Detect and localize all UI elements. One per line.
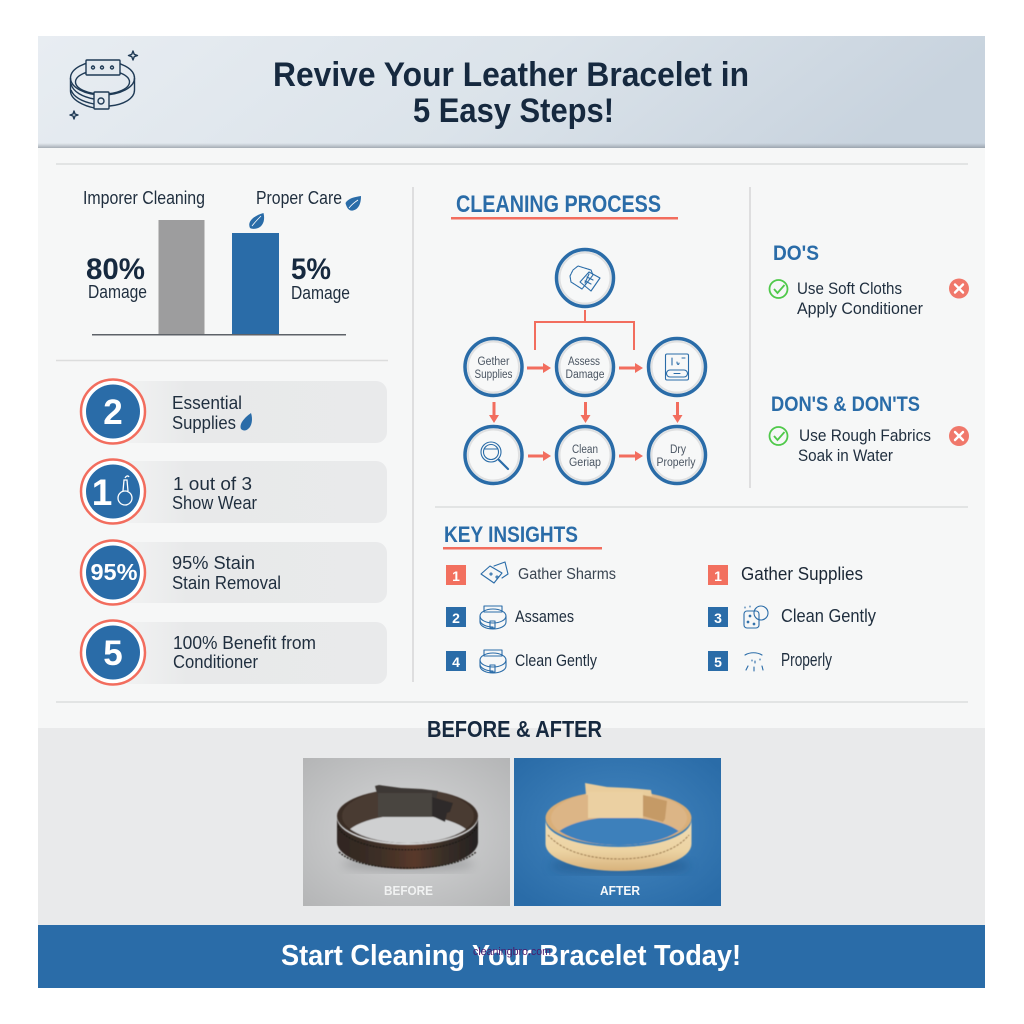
insight: assames: 2 xyxy=(452,610,460,626)
value: 5% damage: Damage xyxy=(291,283,350,303)
bar chart: damage comparison xyxy=(83,188,361,336)
icon: check xyxy=(770,427,788,445)
bar: proper 5% xyxy=(232,233,279,335)
card: essential supplies: Essential xyxy=(172,393,242,413)
card: essential supplies: 2 xyxy=(103,393,123,432)
key insights list xyxy=(446,562,876,673)
bar: improper 80% xyxy=(158,220,204,335)
icon: leaf by proper care xyxy=(346,196,361,211)
node: dry properly xyxy=(648,426,706,484)
value: 80% damage: 80% xyxy=(86,253,145,286)
do's text: Use Soft Cloths xyxy=(797,279,902,298)
node: clean geriap: Geriap xyxy=(569,457,601,469)
insight: gather supplies: Gather Supplies xyxy=(741,564,863,584)
card: 95% stain removal xyxy=(81,540,387,604)
node: clean geriap: Clean xyxy=(572,444,598,456)
call to action banner xyxy=(38,925,985,988)
icon: bracelet with sparkles xyxy=(70,51,138,119)
card: essential supplies: Supplies xyxy=(172,413,236,433)
node: assess damage xyxy=(556,338,614,396)
insight: gather sharms: Gather Sharms xyxy=(518,566,616,583)
node: magnifier icon xyxy=(465,426,522,484)
don'ts text xyxy=(798,426,931,465)
panel: don's and don'ts xyxy=(770,393,969,465)
stat cards xyxy=(81,380,387,684)
card: 1 out of 3: 1 out of 3 xyxy=(173,474,252,494)
call to action banner: Start Cleaning Your Bracelet Today! xyxy=(281,940,741,972)
heading: do's: DO'S xyxy=(773,242,819,265)
node: top icon xyxy=(556,250,614,306)
photo: before bracelet: BEFORE xyxy=(384,883,433,898)
insight: clean gently left xyxy=(446,650,598,673)
don'ts text: Use Rough Fabrics xyxy=(799,426,931,445)
heading: before & after: BEFORE & AFTER xyxy=(427,716,602,742)
card: 100% benefit: 100% Benefit from xyxy=(173,633,316,653)
icon: check xyxy=(770,280,788,298)
insight: properly xyxy=(708,650,832,671)
insight: clean gently right: Clean Gently xyxy=(781,606,876,626)
card: 1 out of 3: 1 xyxy=(92,472,112,513)
heading: don's & don'ts: DON'S & DON'TS xyxy=(771,393,920,416)
value: 5% damage xyxy=(291,253,350,303)
card: 1 out of 3 xyxy=(81,460,387,524)
card: 95% stain removal: 95% Stain xyxy=(172,553,255,573)
value: 80% damage: Damage xyxy=(88,282,147,302)
do's text xyxy=(797,279,923,318)
insight: gather sharms xyxy=(446,562,616,585)
node: gether supplies: Supplies xyxy=(474,369,513,381)
node: assess damage: Assess xyxy=(568,356,600,368)
node: gether supplies: Gether xyxy=(478,356,510,368)
insight: properly: Properly xyxy=(781,650,832,670)
node: dry properly: Dry xyxy=(670,444,686,456)
insight: clean gently right: 3 xyxy=(714,610,722,626)
card: 95% stain removal: 95% xyxy=(90,559,138,585)
insight: clean gently right xyxy=(708,606,876,628)
card: essential supplies xyxy=(81,380,387,444)
title: Revive Your Leather Bracelet in xyxy=(273,56,749,94)
panel: do's xyxy=(770,242,969,318)
node: assess damage: Damage xyxy=(566,369,604,381)
label: proper care: Proper Care xyxy=(256,188,342,208)
card: 100% benefit: Conditioner xyxy=(173,652,258,672)
node: dry properly: Properly xyxy=(656,457,696,469)
node: gether supplies xyxy=(465,338,522,396)
title xyxy=(273,56,749,130)
value: 5% damage: 5% xyxy=(291,253,331,286)
header band xyxy=(38,36,985,148)
watermark: cleaningbro.com xyxy=(473,946,551,958)
heading: cleaning process: CLEANING PROCESS xyxy=(456,191,661,218)
insight: properly: 5 xyxy=(714,654,722,670)
insight: clean gently left: 4 xyxy=(452,654,460,670)
arrows xyxy=(489,363,682,461)
insight: assames xyxy=(446,606,574,629)
section: before and after xyxy=(38,716,985,925)
insight: clean gently left: Clean Gently xyxy=(515,652,598,670)
heading: key insights: KEY INSIGHTS xyxy=(444,522,578,547)
do's text: Apply Conditioner xyxy=(797,299,923,318)
axis xyxy=(92,334,346,336)
node: device icon xyxy=(648,338,706,396)
icon: cross xyxy=(949,426,969,446)
card: 95% stain removal: Stain Removal xyxy=(172,573,281,593)
icon: cross xyxy=(949,278,969,298)
flowchart xyxy=(465,250,706,484)
label: improper cleaning: Imporer Cleaning xyxy=(83,188,205,208)
title: 5 Easy Steps! xyxy=(413,92,614,130)
don'ts text: Soak in Water xyxy=(798,446,893,465)
node: clean geriap xyxy=(556,426,614,484)
connector bracket xyxy=(535,310,634,350)
card: 100% benefit xyxy=(81,620,387,684)
insight: gather sharms: 1 xyxy=(452,568,460,584)
insight: gather supplies: 1 xyxy=(714,568,722,584)
icon: leaf on bar xyxy=(249,213,264,229)
card: 1 out of 3: Show Wear xyxy=(172,493,257,513)
card: 100% benefit: 5 xyxy=(103,634,123,673)
photo: before bracelet xyxy=(303,758,510,906)
photo: after bracelet xyxy=(514,758,721,906)
insight: assames: Assames xyxy=(515,608,574,626)
photo: after bracelet: AFTER xyxy=(600,883,641,898)
value: 80% damage xyxy=(86,253,147,302)
